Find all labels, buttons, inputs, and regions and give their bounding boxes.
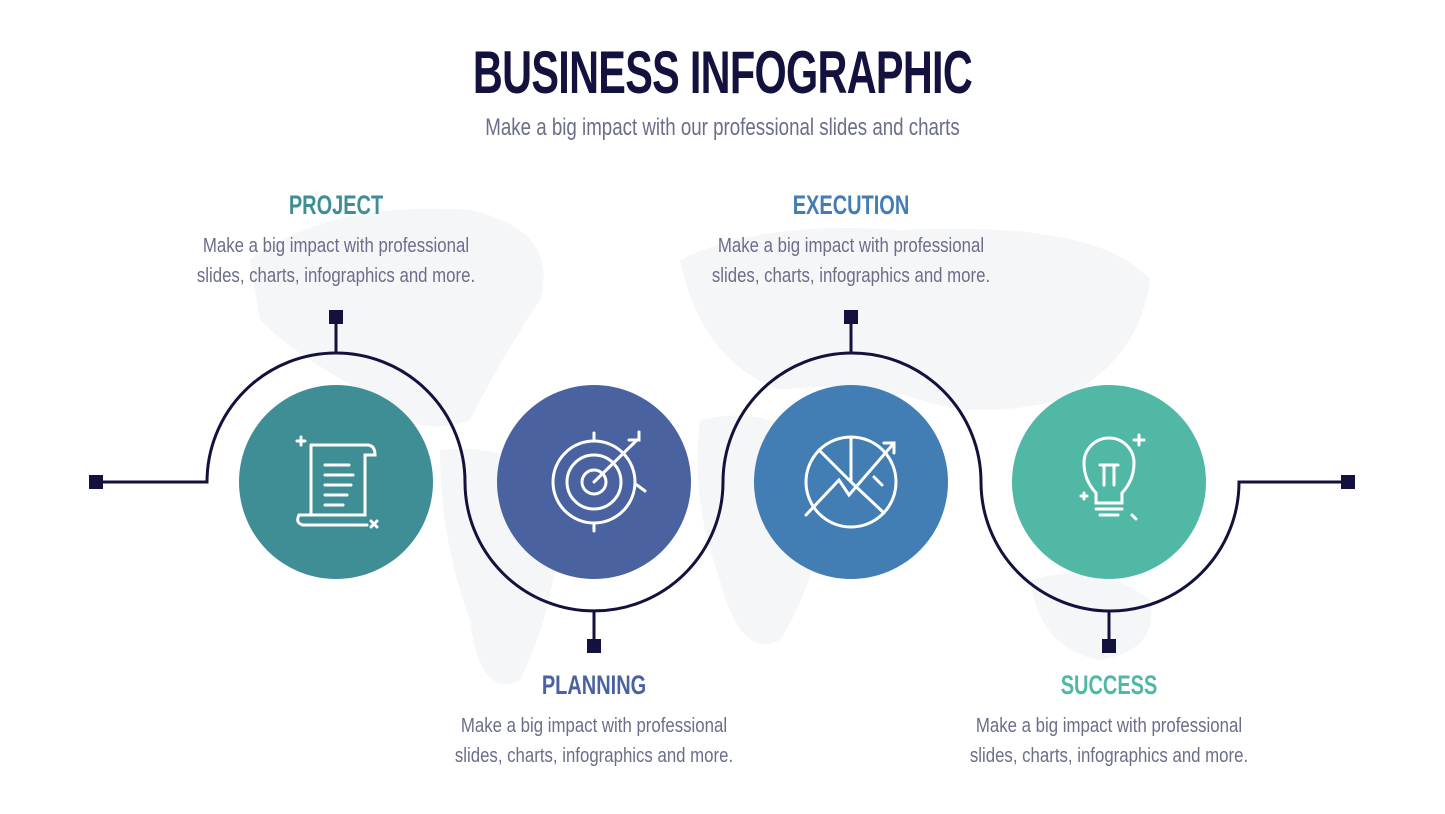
icon circle: planning target <box>497 385 691 579</box>
step: success: slides, charts, infographics and more. <box>970 745 1248 767</box>
step: planning: Make a big impact with professional <box>461 715 727 737</box>
step: execution: slides, charts, infographics and more. <box>712 265 990 287</box>
icon circle: success bulb <box>1012 385 1206 579</box>
step: planning: PLANNING <box>542 670 646 700</box>
step: project <box>197 190 475 287</box>
icon circle: project scroll <box>239 385 433 579</box>
step: planning <box>455 670 733 767</box>
step: project: slides, charts, infographics and more. <box>197 265 475 287</box>
step: execution: Make a big impact with professional <box>718 235 984 257</box>
step: execution <box>712 190 990 287</box>
step: success: SUCCESS <box>1061 670 1157 700</box>
step: project: Make a big impact with professional <box>203 235 469 257</box>
step: success <box>970 670 1248 767</box>
icon circle: execution chart <box>754 385 948 579</box>
step: project: PROJECT <box>289 190 383 220</box>
step: planning: slides, charts, infographics and more. <box>455 745 733 767</box>
subtitle: Make a big impact with our professional slides and charts <box>485 114 960 141</box>
title: BUSINESS INFOGRAPHIC <box>473 39 972 106</box>
step: execution: EXECUTION <box>793 190 909 220</box>
step: success: Make a big impact with professional <box>976 715 1242 737</box>
